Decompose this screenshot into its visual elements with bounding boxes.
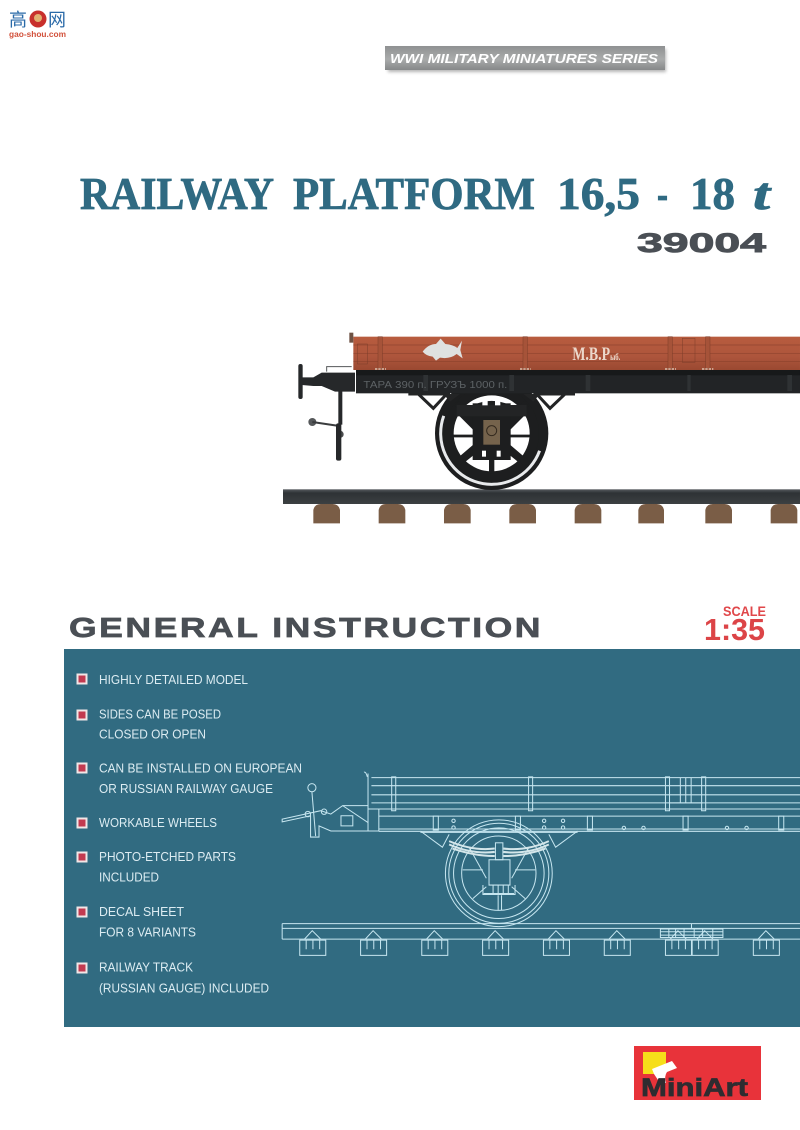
- MiniArt logo: [634, 1046, 761, 1102]
- watermark logo: [9, 10, 66, 39]
- axle box: [483, 420, 500, 445]
- feature: railway gauge: CAN BE INSTALLED ON EUROPEAN: [99, 762, 302, 776]
- logo: white brush mark: [652, 1061, 677, 1083]
- scale label: SCALE: [723, 603, 766, 619]
- feature: railway gauge: OR RUSSIAN RAILWAY GAUGE: [99, 782, 273, 796]
- logo: wordmark: MiniArt: [641, 1074, 749, 1102]
- title: 16,5: [557, 168, 640, 219]
- title: t: [753, 168, 772, 219]
- icon: fish emblem: [423, 339, 463, 361]
- scale label: [704, 603, 766, 647]
- feature: railway track: RAILWAY TRACK: [99, 960, 194, 974]
- blueprint: wheel: [445, 820, 552, 927]
- blueprint: rail clips: [304, 931, 774, 949]
- underframe beam: [356, 370, 800, 393]
- blueprint: joint plate: [660, 929, 723, 937]
- title: [80, 168, 772, 219]
- title: -: [657, 168, 668, 219]
- illustration: railway platform: [283, 333, 800, 523]
- feature: highly detailed model: HIGHLY DETAILED MODEL: [99, 673, 248, 687]
- product number: 39004: [637, 228, 766, 258]
- lettering: М.В.Рыб.: М.В.Рыб.: [572, 344, 620, 365]
- scale value: 1:35: [704, 612, 765, 647]
- blueprint: track: [282, 924, 800, 955]
- blueprint: side boards: [364, 772, 800, 831]
- feature: railway track: (RUSSIAN GAUGE) INCLUDED: [99, 982, 269, 996]
- panel: general instruction: [64, 649, 800, 1027]
- feature: railway gauge: [78, 762, 302, 796]
- feature: photo-etched parts: INCLUDED: [99, 870, 159, 884]
- logo: yellow square: [643, 1052, 666, 1074]
- title: 18: [690, 168, 735, 219]
- feature: sides can be posed: [78, 708, 221, 742]
- side board: [349, 333, 800, 370]
- sleepers: [313, 504, 797, 523]
- feature list: [78, 673, 302, 996]
- spring and hangers: [408, 394, 575, 416]
- blueprint: coupler: [282, 784, 368, 837]
- feature: workable wheels: WORKABLE WHEELS: [99, 816, 217, 830]
- lettering: tare and load: ТАРА 390 п. ГРУЗЪ 1000 п.: [363, 380, 507, 391]
- watermark: site address: gao-shou.com: [9, 29, 66, 39]
- title: RAILWAY: [80, 168, 274, 219]
- blueprint: sleepers: [300, 940, 779, 955]
- series badge: [385, 46, 666, 72]
- feature: decal sheet: DECAL SHEET: [99, 905, 184, 919]
- coupler and hook: [298, 364, 355, 461]
- watermark: characters: [9, 10, 66, 30]
- track: [283, 489, 800, 523]
- blueprint: underframe: [379, 816, 800, 831]
- feature: railway track: [78, 960, 269, 996]
- feature: photo-etched parts: [78, 850, 236, 884]
- wheel: [426, 368, 557, 499]
- icon: watermark gear: [30, 10, 46, 28]
- feature: decal sheet: FOR 8 VARIANTS: [99, 926, 196, 940]
- badge text: WWI MILITARY MINIATURES SERIES: [390, 51, 658, 66]
- watermark: characters: 高: [9, 10, 27, 30]
- rail: [283, 489, 800, 504]
- feature: sides can be posed: CLOSED OR OPEN: [99, 728, 206, 742]
- watermark: characters: 网: [48, 10, 66, 30]
- feature: decal sheet: [78, 905, 196, 940]
- feature: photo-etched parts: PHOTO-ETCHED PARTS: [99, 850, 236, 864]
- title: PLATFORM: [293, 168, 535, 219]
- feature: sides can be posed: SIDES CAN BE POSED: [99, 708, 221, 722]
- blueprint: leaf spring: [420, 831, 578, 895]
- blueprint drawing: [282, 772, 800, 955]
- section heading: GENERAL INSTRUCTION: [69, 612, 543, 643]
